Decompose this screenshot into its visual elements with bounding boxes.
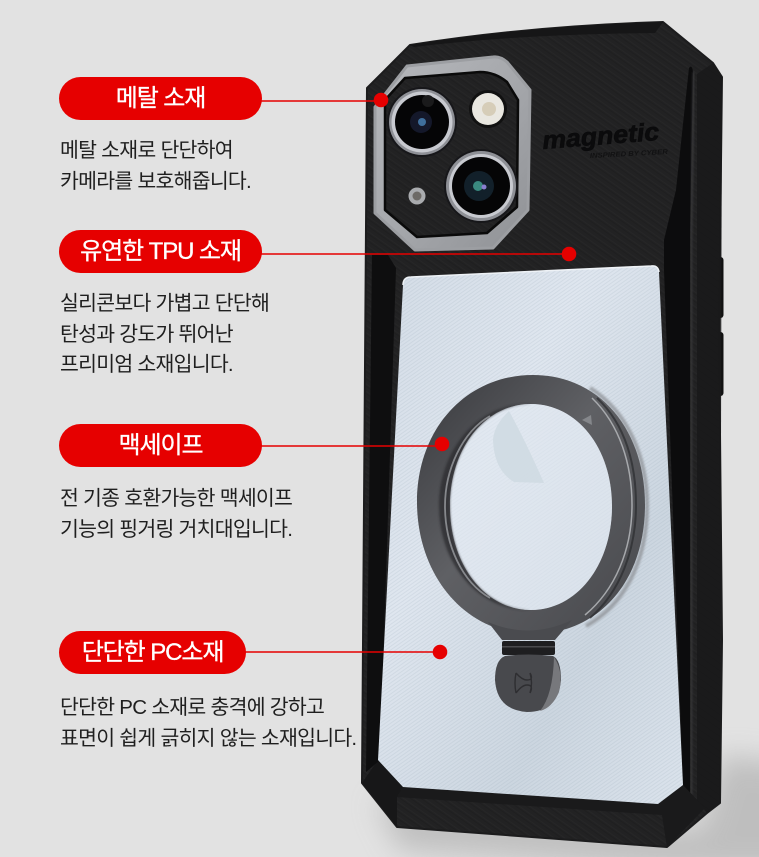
magnetic logo: INSPIRED BY CYBER bbox=[590, 149, 668, 160]
description: metal: 카메라를 보호해줍니다. bbox=[60, 170, 251, 192]
inner bevel, tapering crescent on the left bbox=[439, 404, 531, 610]
microphone bbox=[408, 188, 426, 204]
flash bbox=[469, 90, 507, 128]
heading pill: TPU: 유연한 TPU 소재 bbox=[80, 238, 241, 265]
heading pill: PC bbox=[59, 631, 246, 674]
description: MagSafe: 기능의 핑거링 거치대입니다. bbox=[60, 518, 292, 540]
case edge shading bbox=[362, 22, 722, 847]
description: metal bbox=[60, 139, 251, 192]
main lens bbox=[387, 87, 457, 157]
description: TPU: 탄성과 강도가 뛰어난 bbox=[60, 322, 233, 346]
description: TPU bbox=[60, 292, 269, 376]
camera module bbox=[375, 57, 530, 250]
description: MagSafe: 전 기종 호환가능한 맥세이프 bbox=[60, 487, 292, 510]
ring hinge and tab bbox=[495, 641, 561, 712]
ring neck bbox=[488, 620, 572, 640]
heading pill: metal bbox=[59, 77, 262, 120]
ring arrow mark bbox=[582, 415, 592, 425]
heading pill: MagSafe bbox=[59, 424, 262, 467]
heading pill: metal: 메탈 소재 bbox=[116, 85, 205, 112]
heading pill: MagSafe: 맥세이프 bbox=[119, 432, 202, 459]
reflection on clear panel bbox=[493, 411, 544, 483]
description: PC: 표면이 쉽게 긁히지 않는 소재입니다. bbox=[60, 726, 356, 750]
phone case body bbox=[362, 22, 722, 847]
callout line: metal bbox=[260, 93, 388, 107]
magsafe finger ring bbox=[417, 375, 647, 640]
heading pill: TPU bbox=[59, 230, 262, 273]
description: TPU: 실리콘보다 가볍고 단단해 bbox=[60, 292, 269, 315]
second lens bbox=[444, 149, 518, 223]
soft outer edge of ring bbox=[586, 388, 647, 626]
side buttons bbox=[714, 257, 724, 396]
clear back panel bbox=[378, 266, 683, 804]
callout line: TPU bbox=[260, 247, 576, 261]
description: MagSafe bbox=[60, 487, 292, 540]
magnetic logo: magnetic bbox=[541, 118, 660, 155]
description: PC: 단단한 PC 소재로 충격에 강하고 bbox=[60, 696, 324, 719]
description: PC bbox=[60, 696, 356, 750]
description: metal: 메탈 소재로 단단하여 bbox=[60, 139, 233, 162]
description: TPU: 프리미엄 소재입니다. bbox=[60, 353, 233, 376]
callout line: MagSafe bbox=[260, 437, 449, 451]
drop shadow bbox=[375, 755, 759, 857]
callout line: PC bbox=[244, 645, 447, 659]
heading pill: PC: 단단한 PC소재 bbox=[82, 639, 223, 666]
